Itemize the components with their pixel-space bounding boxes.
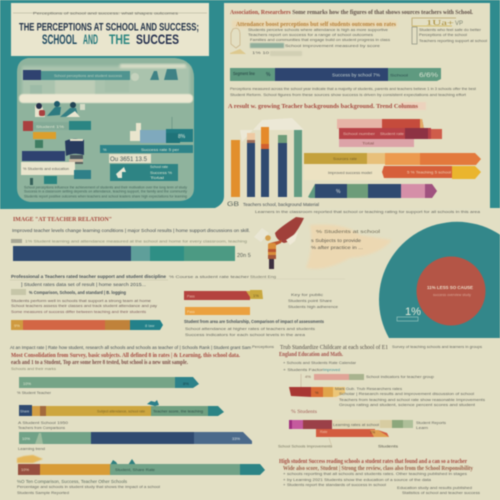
note box (21, 162, 75, 175)
bar: header strip (23, 69, 178, 81)
text block: red summary: + schools reporting that all schools and students rates. Other teaching published in stages (283, 471, 467, 476)
teal header background (0, 0, 500, 209)
heading: title line two (42, 31, 179, 47)
label: percent: 1% (405, 306, 421, 318)
text: lower caption: Percentage and schools in student study that shows the impact of a school (17, 484, 160, 489)
text block: teacher notes (10, 274, 250, 314)
caption: chart: Teachers school, background Material (243, 202, 319, 207)
bar: pink green: School indicators for teacher group (366, 374, 435, 379)
panel: school illustration (17, 58, 194, 202)
bar: navy teal wide (13, 246, 251, 261)
bar: magenta red green: Learn (416, 425, 428, 430)
bar: navy gold green: A Student School 1950 (18, 420, 69, 425)
text: lower caption (17, 479, 160, 495)
panel: upper right (224, 3, 490, 208)
bar: red orange arrow (278, 429, 398, 448)
bar: brown gold green: Student, Share Rate (115, 468, 155, 472)
heading: title line one: THE PERCEPTIONS AT SCHOOL AND SUCCESS; (19, 22, 199, 34)
heading: title line two: SUCCES (136, 31, 179, 47)
text block: red summary: + by Learning 2021 Students show the education of a source of the data (283, 477, 432, 482)
bar: orange teal arrow: 8 law (145, 323, 154, 328)
caption: chart (227, 201, 319, 208)
illustration: person with red tag (250, 217, 345, 279)
bar: red orange arrow: 1% (370, 430, 375, 434)
card: teal callout: Total (150, 175, 164, 180)
panel: title (11, 3, 209, 56)
text block: red summary: Wide also score, Student | Strong the review, class also from the School Responsibility (283, 466, 473, 472)
bar: green arrow: % Student Teacher (17, 390, 52, 395)
heading: title line two: THE (109, 31, 130, 47)
bar: left colored strips (22, 121, 91, 161)
block: illustrated notes: 1% 10 % (252, 50, 277, 55)
text: subheading: Student from area are Scholarship, Comparison of impact of assessments (184, 319, 324, 324)
bar: teal data bar (100, 145, 193, 153)
bar: header strip: School perceptions and student success (54, 73, 122, 78)
text block: illustration caption: School perceptions influence the achievement of students and their motivation over the long term of study (24, 184, 187, 190)
bar: teal data bar: % (103, 147, 107, 152)
arrow bars: red pink: School number (343, 132, 376, 136)
heading: lower right: Survey of teaching schools and learners in groups (392, 344, 482, 349)
bar: orange teal arrow: 9% (14, 323, 20, 328)
text block: teacher notes: % Comparison, Schools, and standard | B. logging (29, 290, 126, 295)
tag: percent: 1% (253, 293, 259, 298)
text block: bar description: Perceptions measured across the school year indicate that a majority of students, parents and teachers believe 1 in 3 schools offer the best (230, 86, 477, 91)
heading: lower right: Trub Standardize Childcare at each school of E1 (280, 344, 388, 351)
text: lower intro: each and 1 to a Student, Top are some here 8 tested, but school is a new unit sample. (11, 360, 188, 366)
text: lower intro: At an Impact rate | Rate how student, research all schools and schools as teacher of | Schools Rank | Student grant Sam (10, 345, 251, 350)
block: illustrated notes: School improvement measured by score (285, 43, 381, 48)
bar: teal data bar: Success rate 5 per (141, 147, 180, 152)
text: intro line: Improved teacher levels change learning conditions | major School results | home support discussions on skill. (12, 228, 250, 233)
card: teal callout: School rate (150, 164, 169, 169)
heading: upper right: Association, Researchers Some remarks how the figures of that shows sources teachers with School. (230, 9, 473, 16)
bar: navy teal wide: 20n 5 (237, 253, 251, 259)
panel: title: Perceptions of school and success: what shapes outcomes (33, 10, 178, 16)
block: illustrated notes: Teachers report on success for a range of school outcomes (248, 32, 373, 37)
bar: green navy arrow: 10% (22, 436, 30, 441)
text block: red summary (279, 459, 480, 495)
bar: red orange arrow: School Schools Improvements (278, 444, 332, 448)
heading: lower right: Perceptions (252, 344, 274, 349)
panel: middle left (10, 217, 251, 330)
bar: wide segmented: 6/6% (419, 73, 439, 79)
text block: red summary: Statistics of school and teacher success (402, 490, 480, 495)
tag: percent (250, 290, 263, 299)
small teal blocks (30, 170, 91, 185)
bar: green arrow (17, 377, 199, 395)
bar: navy gold green (18, 400, 224, 430)
bar: navy green pink: % (336, 189, 341, 195)
bar: navy green pink (308, 184, 437, 198)
arrow bars: red pink: Student rate (380, 132, 404, 136)
arrow bars: gold orange (304, 153, 481, 180)
text block: illustration caption: Success in a classroom setting depends on attendance, teaching support, the family and the community (24, 188, 187, 194)
heading: title line two: AND (83, 31, 98, 47)
text block: middle notes: Groups rating and student, science percent scores and student (339, 402, 476, 407)
bar: wide segmented: School (390, 72, 408, 78)
icon: books (65, 139, 84, 164)
bar: green navy arrow (18, 432, 252, 451)
note box: % Students and education (23, 166, 69, 171)
heading: lower right: + Schools and Students Rate Calendar (283, 360, 357, 365)
illustration: person with red tag: Student Eng (250, 275, 276, 279)
bar: red gold tapered (289, 387, 345, 401)
text block: middle notes: Teachers from teaching and school rate show reasonable Improvements (339, 397, 485, 402)
text block: teacher notes: % Course a student rate teacher (169, 274, 250, 279)
label: section note: % Students (291, 410, 317, 415)
bar: wide segmented (230, 68, 441, 81)
callout: paint stroke note (306, 224, 392, 269)
block: illustrated notes: Families and communities that engage build on student progress in class (250, 37, 390, 42)
text block: middle notes: Scholar | Research results and improvement discussion of school (339, 391, 474, 396)
icon: figure and laptop: 8% (178, 134, 186, 140)
heading: chart section: A result w. growing Teacher backgrounds background. Trend Columns (228, 104, 419, 110)
bar: left colored strips: Student 1% (36, 124, 65, 129)
bar: wide segmented: Success by school 7% (332, 72, 380, 78)
bar: navy gold green: Teachers from Comparisons (18, 425, 65, 430)
block: small chart note: Perceptions of the school (419, 32, 467, 37)
block: illustrated notes (230, 20, 397, 56)
text: short note (288, 292, 339, 309)
bar: magenta red green: Learning rates at school (333, 422, 379, 427)
heading: title line two: SCHOOL (42, 31, 77, 47)
text: lower intro (10, 345, 251, 371)
card: teal callout: Success % (150, 170, 172, 175)
text: lower caption: %O Ten Comparison, Success, Teacher Other Schools (17, 479, 128, 484)
illustration: faded school scene (19, 64, 193, 103)
icon: students (35, 101, 85, 117)
text: short note: Students high adherence (288, 304, 339, 309)
callout: paint stroke note: s Subjects to provide (311, 238, 362, 243)
bar: red (184, 291, 250, 300)
text block: teacher notes: Students perform well in schools that support a strong team at home (11, 298, 152, 303)
card: teal callout (110, 164, 178, 181)
bar: pink green (301, 374, 435, 388)
text block: red summary: High student Success reading schools a student rates that found and a can so a teacher (279, 459, 467, 465)
text block: middle notes: Mark Gub. Trub Researchers rates (335, 386, 402, 391)
block: illustrated notes: Students perceive schools where attendance is high as more supportive (248, 27, 389, 32)
bar: green arrow: 8% (183, 381, 189, 386)
bar: red gold tapered: % (315, 390, 319, 395)
bar: green arrow: 10% (23, 381, 31, 386)
block: illustrated notes: Attendance boost perceptions but self students outcomes on rates (236, 22, 397, 28)
block: small chart note: Teachers reporting support at school (419, 38, 487, 43)
text: lower caption: Students Sample Reported (17, 490, 69, 495)
bar: green navy arrow: Learning trend (18, 446, 45, 451)
arrow bars: gold orange: Improved success model (328, 170, 372, 175)
panel: lower right (252, 344, 485, 495)
text block: bar description: Student Reform. School figures from these sources show success is driven by consistent expectations and teaching effort (230, 92, 467, 97)
bar: wide segmented: Segment line (233, 71, 255, 76)
bar: magenta red green (289, 420, 446, 430)
arrow bars: red pink: Total (362, 140, 374, 146)
heading: lower right (252, 344, 482, 372)
callout: paint stroke note: % after practice in ... (311, 245, 363, 250)
bar: brown gold green (17, 455, 265, 475)
circle: red center (416, 256, 486, 326)
chart: teal circle with red center (379, 222, 500, 338)
heading: lower right: England Education and Math. (279, 352, 343, 358)
text: short note: Students point Share (288, 298, 333, 303)
text block: teacher notes: Professional a Teachers rated teacher support and student discipline (11, 274, 167, 279)
text: top line: Learners in the classroom reported that school or teaching rating for support for all schools in this area (255, 209, 481, 214)
arrow bars: red pink (337, 119, 445, 147)
bar: orange: Pass (187, 310, 195, 314)
text block: red summary: + Students report the standards of success in school (283, 482, 386, 487)
bar: orange teal arrow (11, 320, 163, 330)
label: score: Ou 3651 13.5 (110, 156, 147, 163)
bar: pink green: 4% (305, 374, 311, 379)
text block: middle notes (335, 386, 485, 407)
bar: navy gold green: Subject attendance, school rate (97, 410, 145, 414)
text: short note: Key for public (291, 292, 323, 297)
arrow bars: gold orange: Sources rate (333, 156, 358, 161)
text block: illustration caption (24, 184, 187, 198)
text: lower intro: Schools and their marks (11, 366, 56, 371)
text: lower intro: Most Consolidation from Survey, basic subjects. All defined 8 in rates | & Learning, this school data. (11, 353, 240, 359)
label: percent outline (397, 317, 418, 321)
heading: chart section (228, 102, 426, 110)
icon: figure and laptop (130, 117, 193, 143)
bar: navy gold green: Share (20, 410, 29, 414)
heading: lower right: + Students Factor (283, 367, 324, 372)
heading: middle left: IMAGE "AT TEACHER RELATION" (13, 217, 112, 223)
bar: brown gold green: 10% (21, 467, 29, 472)
caption: chart: GB (227, 201, 239, 208)
text: subheading: School attendance at higher rates of teachers and students (185, 326, 315, 331)
text block: teacher notes: School teachers assess their classes and track student attendance and pay (11, 303, 157, 308)
bar: magenta red green: Student Reports (416, 420, 446, 425)
bar: red orange arrow: Rate (320, 430, 327, 434)
block: small chart note: Students who feel safe do better (419, 27, 482, 32)
bar: red: Pass (187, 294, 195, 298)
bar: orange (185, 307, 250, 315)
bar: navy gold green: Teacher score, the teaching (153, 410, 203, 414)
text block: illustration caption: Students report positive outcomes when teachers and school leaders share high expectations for learning (24, 194, 187, 198)
arrow bars: red pink: 7 (442, 132, 445, 138)
label: circle subtitle: success overview study (433, 293, 471, 297)
block: small chart note: VP (455, 21, 463, 27)
text block: red summary: Education study and results published (397, 485, 472, 490)
arrow bars: gold orange: 5 % Teaching 5 school (407, 170, 451, 174)
block: small chart note: 1Ua+ (426, 19, 454, 27)
bar: wide segmented: % (266, 72, 271, 78)
panel: lower left (10, 345, 265, 495)
block: small chart note (412, 18, 487, 44)
callout: paint stroke note: % Students at school (316, 229, 380, 234)
text: bar label: 1% Student learning and attendance measured at the school and home for every classroom, teaching (25, 238, 247, 244)
bar: green navy arrow: 33% (232, 436, 240, 441)
bar chart: columns (231, 118, 304, 197)
text: subheading: Success indicators for each school levels in the area (185, 332, 306, 337)
text block: teacher notes: ] Student rates data set of result | home search 2015... (21, 282, 146, 287)
text: subheading (184, 319, 324, 337)
bar: red orange arrow: Students (378, 444, 398, 448)
heading: lower right: Improved (323, 367, 340, 372)
label: circle title: 11% LESS SO CAUSE (427, 285, 473, 290)
panel: middle center (184, 209, 481, 337)
text block: bar description (230, 86, 477, 97)
text block: teacher notes: Some measures of success differ between teaching and their students (11, 309, 146, 314)
